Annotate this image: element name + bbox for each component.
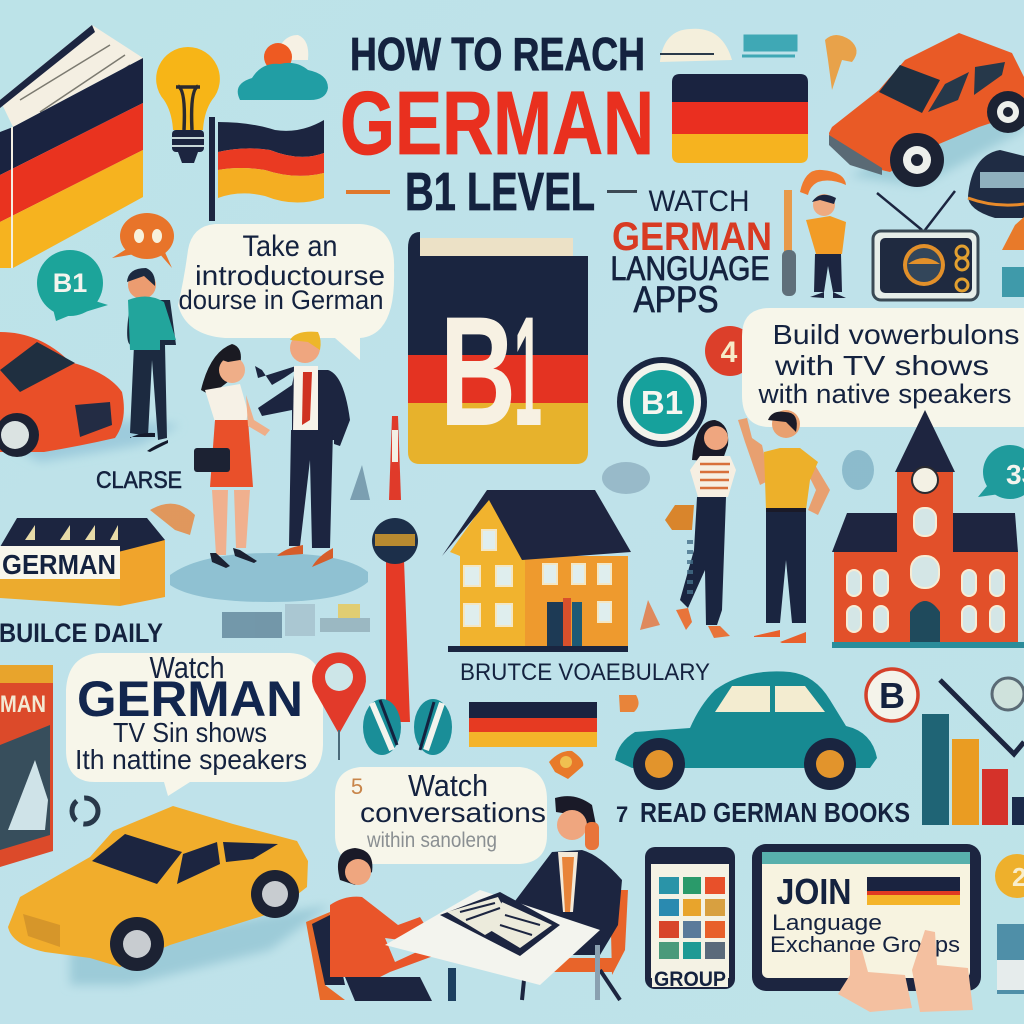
icon: helmet top right <box>968 150 1024 297</box>
icon: waving german flag <box>209 117 324 221</box>
title: B1 LEVEL <box>405 162 595 222</box>
text: clarse: CLARSE <box>96 467 182 494</box>
icon: small orange badges <box>549 695 639 779</box>
speech bubble: take an introductory course <box>178 224 394 360</box>
badge: 4: 4 <box>721 336 738 369</box>
icon: title dashes <box>346 190 637 194</box>
figure: woman with bag and man in suit <box>170 332 368 602</box>
building: german store <box>0 518 165 606</box>
speech bubble: watch conversations: within sanoleng <box>366 829 497 852</box>
icon: orange car top right <box>829 33 1024 187</box>
badge: B: B <box>879 675 905 716</box>
building: german store: GERMAN <box>2 549 116 580</box>
woman at table <box>306 848 436 1001</box>
speech bubble: build vocabulary: Build vowerbulons <box>772 319 1020 350</box>
icon: tv <box>873 191 978 300</box>
icon: books and arrow <box>922 678 1024 825</box>
title: HOW TO REACH <box>350 28 645 80</box>
icon: TV tower <box>372 416 418 722</box>
icon: map pin <box>312 652 366 760</box>
tablet: join language exchange groups <box>752 844 981 991</box>
title <box>340 28 654 222</box>
woman <box>194 344 270 568</box>
icon: tablet: GROUP <box>654 968 726 991</box>
platform <box>170 553 368 602</box>
speech bubble: watch german tv shows: Ith nattine speakers <box>75 744 307 775</box>
text: watch german language apps: APPS <box>634 279 718 320</box>
speech bubble: watch german tv shows: GERMAN <box>77 671 303 727</box>
text: watch german language apps: WATCH <box>648 185 750 218</box>
icon: cloud and sun <box>238 35 328 100</box>
building: red clock tower school <box>832 410 1024 648</box>
speech bubble: watch conversations: 5 <box>351 774 363 799</box>
man on phone <box>512 796 628 1000</box>
text: read german books: READ GERMAN BOOKS <box>640 797 910 828</box>
big B1 book: 1 <box>514 285 542 459</box>
badge: yellow coin right <box>995 854 1024 898</box>
icon: pointing hands <box>838 930 973 1012</box>
badge: B <box>866 669 918 721</box>
decorative icons middle <box>150 450 874 630</box>
big B1 book: B <box>440 285 516 459</box>
text: read german books: 7 <box>616 802 628 827</box>
icon: picture right edge <box>997 924 1024 994</box>
speech bubble: build vocabulary: with native speakers <box>757 379 1012 409</box>
title: GERMAN <box>340 74 654 174</box>
icon: magazine left <box>0 665 53 867</box>
icon: teal vintage car <box>615 671 877 790</box>
building: yellow house <box>442 490 631 652</box>
text: watch german language apps: GERMAN <box>612 215 772 259</box>
woman striped shirt <box>665 420 736 638</box>
text: watch german language apps <box>610 185 772 320</box>
big B1 book <box>408 232 588 464</box>
speech bubble: watch german tv shows: TV Sin shows <box>113 717 267 748</box>
figure: two people studying at table <box>306 796 628 1001</box>
speech bubble: take an introductory course: introductourse <box>195 260 385 291</box>
icon: B1 badge bubble <box>37 250 108 321</box>
speech bubble: take an introductory course: dourse in German <box>178 285 384 315</box>
text: practice daily: BUILCE DAILY <box>0 618 163 648</box>
open book <box>440 892 560 956</box>
icon: B1 badge bubble: B1 <box>53 268 87 298</box>
text: practice vocabulary: BRUTCE VOAEBULARY <box>460 659 710 686</box>
badge: B1 circle: B1 <box>641 384 683 421</box>
icon: orange speech bubble <box>112 213 174 268</box>
badge: 33 bubble <box>978 445 1024 499</box>
speech bubble: build vocabulary: with TV shows <box>774 350 989 381</box>
icon: magazine left: MAN <box>0 691 46 718</box>
icon: flag rectangle top right <box>672 74 808 163</box>
badge: B1 circle <box>620 360 704 444</box>
icon: red car left <box>0 332 180 462</box>
figure: man in green shirt <box>127 268 176 452</box>
speech bubble: watch conversations: Watch <box>408 768 488 803</box>
man yellow shirt <box>738 410 830 643</box>
speech bubble: build vocabulary <box>742 308 1024 427</box>
tablet: join language exchange groups: JOIN <box>776 871 852 912</box>
tablet: join language exchange groups: Language <box>772 910 882 935</box>
figure: couple talking right <box>665 410 830 643</box>
tablet: join language exchange groups: Exchange Groups <box>770 932 960 957</box>
icon: light bulb <box>156 47 220 163</box>
text: watch german language apps: LANGUAGE <box>610 250 770 288</box>
smudge: blurred vehicles under platform <box>222 604 370 638</box>
speech bubble: watch german tv shows: Watch <box>150 650 224 685</box>
icon: flag small <box>469 702 597 747</box>
speech bubble: watch conversations: conversations <box>360 797 546 828</box>
table <box>385 890 600 985</box>
speech bubble: watch conversations <box>335 767 547 864</box>
speech bubble: watch german tv shows <box>66 650 323 796</box>
speech bubble: take an introductory course: Take an <box>242 230 338 263</box>
icon: balloons <box>363 699 452 755</box>
man in suit <box>255 332 350 567</box>
icon: german flag book top left <box>0 25 143 268</box>
figure: man in orange shirt <box>782 170 846 298</box>
icon: yellow car <box>8 806 330 985</box>
badge: 4 <box>705 326 755 376</box>
icon: swirl <box>72 798 98 824</box>
decorative icons top centre right <box>660 29 857 90</box>
icon: tablet <box>645 847 735 991</box>
